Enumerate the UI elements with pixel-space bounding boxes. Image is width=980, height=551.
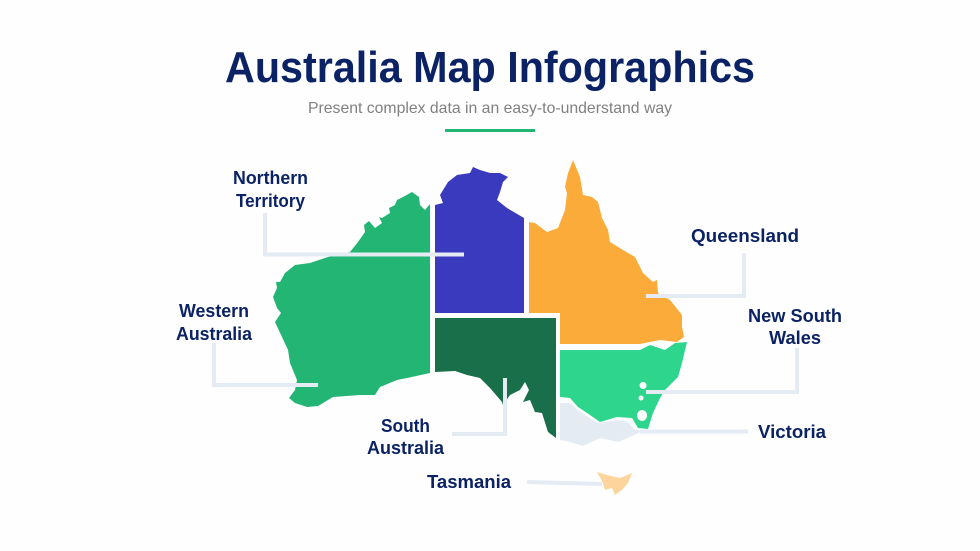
leader line: Queensland — [646, 253, 744, 296]
title underline — [445, 129, 535, 132]
region: Western Australia — [273, 192, 430, 407]
leader line: Tasmania — [527, 482, 602, 484]
leader line: Victoria — [640, 430, 748, 434]
region: Northern Territory — [435, 167, 524, 313]
label: South Australia: South — [381, 416, 430, 436]
label: South Australia: Australia — [367, 438, 445, 458]
label: Western Australia — [176, 301, 253, 344]
label: New South Wales: Wales — [769, 328, 821, 348]
label: Northern Territory: Northern — [233, 168, 308, 188]
label: Western Australia: Australia — [176, 324, 253, 344]
leader line: South Australia — [452, 378, 505, 434]
label: New South Wales — [748, 306, 842, 348]
title: Australia Map Infographics — [225, 43, 755, 92]
label: Queensland: Queensland — [691, 226, 799, 246]
leader line: Northern Territory — [265, 213, 464, 254]
region: New South Wales — [560, 342, 687, 429]
region: Victoria — [560, 403, 645, 446]
label: Tasmania: Tasmania — [427, 472, 512, 492]
region: Queensland — [529, 160, 684, 344]
region: Tasmania — [597, 472, 632, 495]
subtitle: Present complex data in an easy-to-understand way — [308, 100, 672, 117]
map of Australia — [273, 160, 687, 495]
leader line: New South Wales — [646, 348, 797, 392]
label: Northern Territory — [233, 168, 308, 211]
region: South Australia — [435, 318, 556, 438]
leader line: Western Australia — [214, 343, 318, 385]
label: New South Wales: New South — [748, 306, 842, 326]
label: Victoria: Victoria — [758, 422, 827, 442]
label: Northern Territory: Territory — [236, 191, 305, 211]
label: South Australia — [367, 416, 445, 458]
label: Western Australia: Western — [179, 301, 249, 321]
